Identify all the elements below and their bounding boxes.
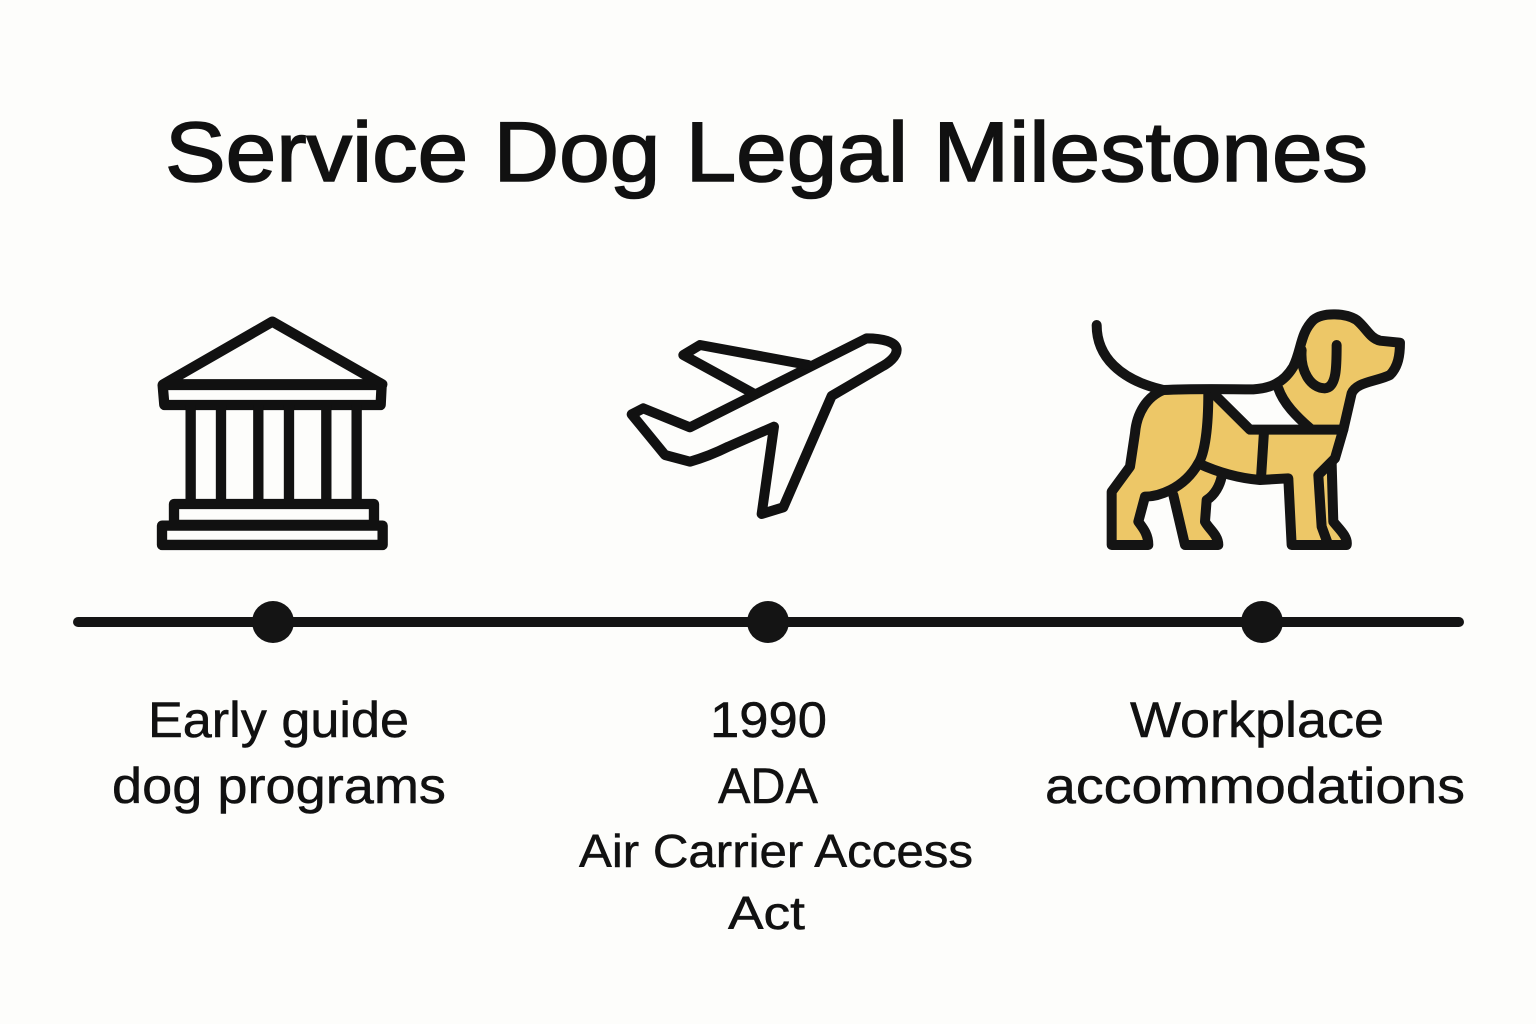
label: workplace accommodations: accommodations [1045, 758, 1465, 814]
milestone marker: 1990 [747, 601, 789, 643]
label: early guide dog programs: dog programs [112, 758, 446, 814]
icon: airplane [632, 338, 897, 514]
label: 1990 ADA and Air Carrier Access Act: Air Carrier Access [579, 825, 973, 877]
icon: service dog with harness [1097, 314, 1400, 545]
label: 1990 ADA and Air Carrier Access Act: ADA [718, 758, 819, 814]
milestone marker: workplace [1241, 601, 1283, 643]
label: 1990 ADA and Air Carrier Access Act [579, 692, 973, 939]
title: Service Dog Legal Milestones [165, 105, 1368, 199]
label: workplace accommodations: Workplace [1130, 692, 1384, 748]
label: 1990 ADA and Air Carrier Access Act: 1990 [710, 692, 827, 748]
milestone marker: early programs [252, 601, 294, 643]
label: early guide dog programs: Early guide [148, 692, 409, 748]
label: workplace accommodations [1045, 692, 1465, 814]
label: early guide dog programs [112, 692, 446, 814]
timeline [78, 601, 1459, 643]
label: 1990 ADA and Air Carrier Access Act: Act [728, 887, 805, 939]
icon: courthouse [162, 322, 383, 545]
